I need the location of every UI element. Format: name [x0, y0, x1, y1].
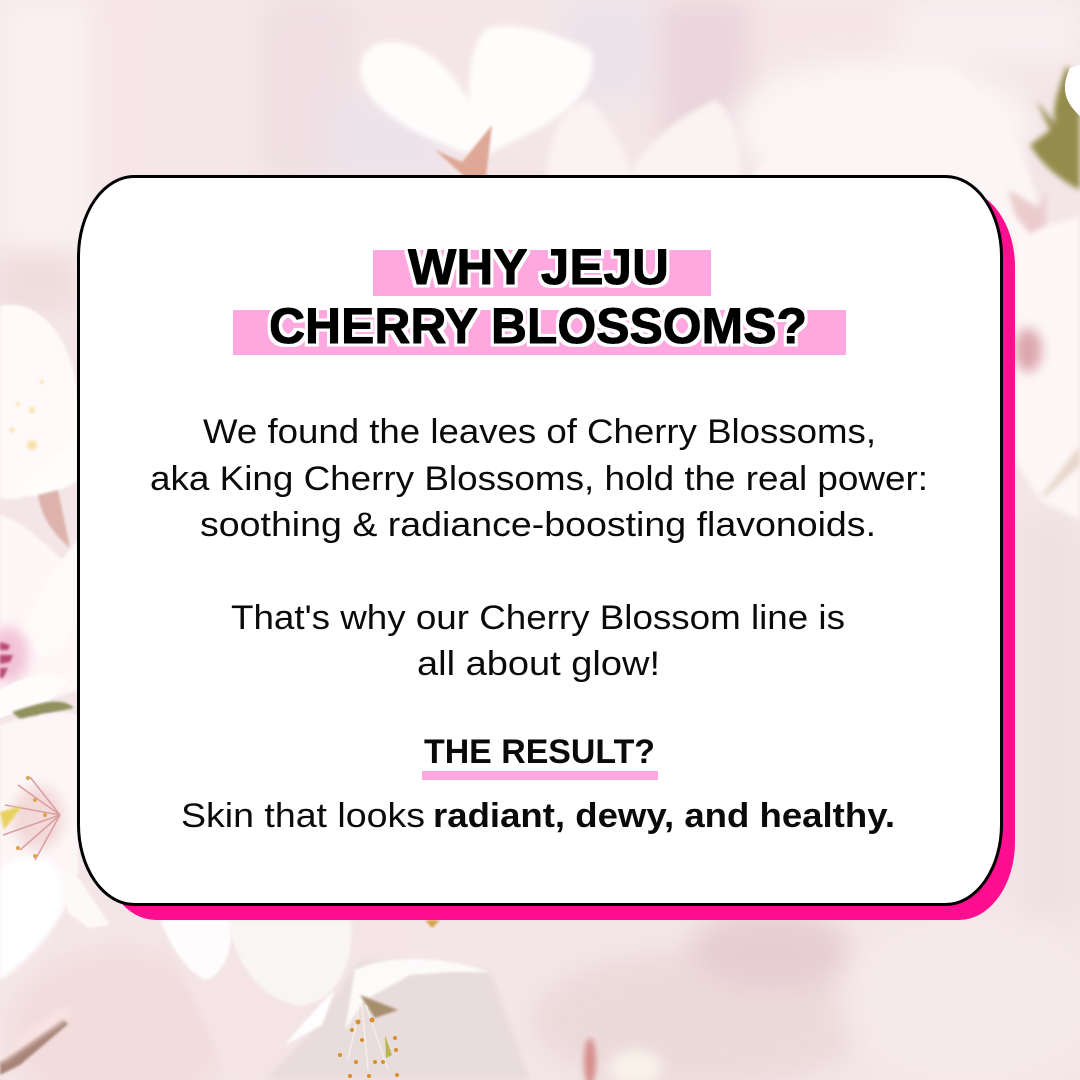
- panel: white card: [78, 176, 1002, 904]
- heading highlight bar 1: [373, 250, 711, 296]
- green sepal top right: [1030, 65, 1080, 190]
- text block: result sentence: Skin that looks: [181, 797, 425, 835]
- subheading underline: [422, 771, 658, 780]
- text block: leaves paragraph: We found the leaves of Cherry Blossoms,: [203, 413, 876, 451]
- subheading: The Result?: THE RESULT?: [424, 733, 655, 771]
- heading line 1: WHY JEJU: [408, 239, 669, 295]
- card drop shadow: magenta: [100, 189, 1015, 920]
- text block: result sentence: radiant, dewy, and healthy.: [433, 797, 895, 835]
- text block: glow paragraph: [231, 599, 845, 683]
- text block: leaves paragraph: aka King Cherry Blossoms, hold the real power:: [150, 460, 928, 498]
- left side middle blossom: [0, 515, 78, 728]
- left side lower blossom with stamens: [0, 713, 110, 980]
- left side upper blossom: [0, 305, 78, 548]
- top petals right of centre: [547, 68, 1040, 240]
- heading highlight bar 2: [233, 310, 846, 355]
- text block: glow paragraph: all about glow!: [417, 645, 660, 683]
- heading: Why Jeju Cherry Blossoms?: [233, 239, 846, 355]
- heading line 2: CHERRY BLOSSOMS?: [269, 298, 807, 354]
- text block: leaves paragraph: [150, 413, 928, 544]
- text block: result sentence: [181, 797, 895, 835]
- text block: glow paragraph: That's why our Cherry Blossom line is: [231, 599, 845, 637]
- bottom blossoms: [0, 920, 662, 1080]
- right side blossoms: [1005, 188, 1080, 520]
- top centre blossom: [360, 26, 593, 178]
- text block: leaves paragraph: soothing & radiance-boosting flavonoids.: [200, 506, 876, 544]
